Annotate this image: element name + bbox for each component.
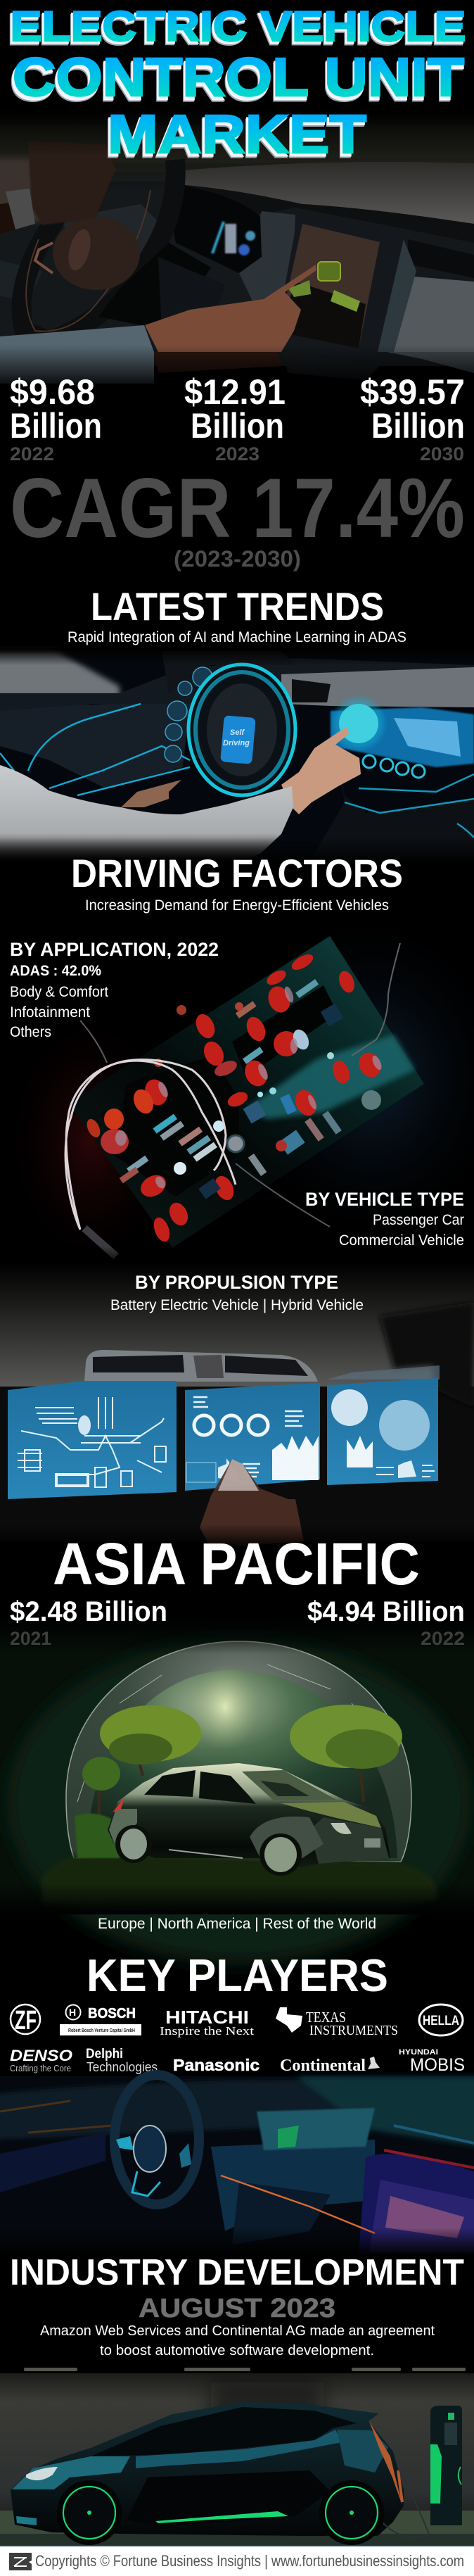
by application segment bbox=[10, 939, 219, 1040]
red highlights on capsules bbox=[115, 985, 383, 1190]
photo: futuristic cockpit bbox=[0, 2075, 474, 2256]
dome bbox=[66, 1641, 411, 1862]
trends photo: self driving dashboard: Self bbox=[230, 728, 245, 737]
by vehicle type segment: Passenger Car bbox=[373, 1212, 464, 1228]
components bbox=[84, 952, 385, 1244]
driving factors text: Increasing Demand for Energy-Efficient Vehicles bbox=[85, 897, 389, 914]
circuit board photo bbox=[0, 908, 474, 1274]
icon: Fortune Business Insights logo bbox=[9, 2553, 32, 2570]
development description bbox=[40, 2323, 435, 2359]
regional values: $2.48 Billion bbox=[10, 1596, 167, 1627]
stat 2030: $39.57 bbox=[360, 372, 465, 412]
logo: Bosch: BOSCH bbox=[88, 2006, 136, 2021]
by propulsion type segment: BY PROPULSION TYPE bbox=[135, 1272, 338, 1293]
industry development heading: INDUSTRY DEVELOPMENT bbox=[10, 2252, 464, 2293]
logo: Hella bbox=[419, 2004, 463, 2035]
regional values: $4.94 Billion bbox=[307, 1596, 465, 1627]
stat 2022: 2022 bbox=[10, 443, 54, 465]
teal lit band bbox=[246, 1035, 415, 1119]
wires bbox=[65, 1060, 236, 1230]
by application segment: BY APPLICATION, 2022 bbox=[10, 939, 219, 960]
left wheel bbox=[57, 2480, 122, 2545]
logo: Hyundai Mobis: HYUNDAI bbox=[399, 2048, 438, 2057]
logo: Hyundai Mobis: MOBIS bbox=[410, 2055, 465, 2075]
latest trends heading: LATEST TRENDS bbox=[91, 584, 384, 629]
logo: Denso: Crafting the Core bbox=[10, 2063, 71, 2073]
by vehicle type segment bbox=[305, 1189, 464, 1249]
title line 1: ELECTRIC VEHICLE bbox=[8, 5, 464, 52]
CAGR period: (2023-2030) bbox=[174, 546, 301, 572]
by vehicle type segment: BY VEHICLE TYPE bbox=[305, 1189, 464, 1210]
development description: Amazon Web Services and Continental AG made an agreement bbox=[40, 2323, 435, 2339]
logo: Hyundai Mobis bbox=[399, 2048, 465, 2075]
title line 3: MARKET bbox=[108, 104, 366, 165]
resistors and small parts bbox=[120, 979, 381, 1199]
by vehicle type segment: Commercial Vehicle bbox=[339, 1232, 464, 1249]
photo: electric car charging bbox=[0, 2368, 474, 2546]
panel left bbox=[8, 1381, 177, 1499]
title line 2: CONTROL UNIT bbox=[13, 47, 464, 108]
title line 2: CONTROL UNIT bbox=[11, 51, 463, 111]
logo: Hitachi bbox=[160, 2007, 254, 2038]
stat 2023: Billion bbox=[191, 406, 284, 446]
title line 2: CONTROL UNIT bbox=[10, 52, 463, 113]
development description: to boost automotive software development. bbox=[100, 2343, 374, 2359]
charging post bbox=[430, 2406, 462, 2525]
title bbox=[8, 3, 466, 169]
propulsion photo: holographic panels bbox=[0, 1263, 474, 1548]
logo: Texas Instruments: INSTRUMENTS bbox=[309, 2023, 398, 2038]
logo: Panasonic: Panasonic bbox=[173, 2056, 260, 2074]
logo: Delphi: Delphi bbox=[86, 2047, 123, 2062]
title line 1: ELECTRIC VEHICLE bbox=[8, 6, 463, 53]
logo: Denso bbox=[10, 2047, 72, 2073]
car bbox=[11, 2402, 404, 2545]
driving factors heading: DRIVING FACTORS bbox=[71, 851, 403, 895]
regional values: 2021 bbox=[10, 1628, 51, 1649]
regional values bbox=[10, 1596, 465, 1649]
logo: ZF: ZF bbox=[15, 2006, 37, 2035]
logo: Hella: HELLA bbox=[423, 2014, 459, 2028]
regional values: 2022 bbox=[421, 1628, 465, 1649]
logo: ZF bbox=[11, 2004, 40, 2035]
stat 2023 bbox=[184, 372, 286, 465]
logo: Bosch: Robert Bosch Venture Capital GmbH bbox=[68, 2028, 135, 2033]
panel right bbox=[327, 1378, 438, 1485]
hero photo: hand touching dashboard screen bbox=[0, 106, 474, 391]
stat 2022 bbox=[10, 372, 102, 465]
company logos bbox=[10, 2004, 465, 2075]
stat 2030 bbox=[360, 372, 465, 465]
logo: Denso: DENSO bbox=[10, 2047, 72, 2064]
logo: Delphi: Technologies bbox=[87, 2060, 158, 2074]
other regions: Europe | North America | Rest of the World bbox=[98, 1916, 376, 1932]
by propulsion type segment: Battery Electric Vehicle | Hybrid Vehicle bbox=[110, 1297, 364, 1313]
logo: Bosch bbox=[60, 2004, 141, 2035]
board bbox=[68, 936, 424, 1248]
logo: Hitachi: Inspire the Next bbox=[160, 2024, 254, 2038]
grass mound bbox=[42, 1851, 437, 1904]
stat 2022: Billion bbox=[10, 406, 102, 446]
by application segment: Infotainment bbox=[10, 1004, 90, 1021]
stat 2023: 2023 bbox=[215, 443, 260, 465]
stat 2030: 2030 bbox=[420, 443, 464, 465]
market value stats bbox=[10, 372, 465, 465]
trends photo: self driving dashboard bbox=[0, 648, 474, 863]
logo: Hitachi: HITACHI bbox=[165, 2007, 249, 2028]
logo: Texas Instruments bbox=[276, 2007, 398, 2038]
trends photo: self driving dashboard: Driving bbox=[223, 739, 250, 747]
title line 3: MARKET bbox=[105, 107, 364, 168]
logo: Delphi bbox=[86, 2047, 158, 2074]
panel middle bbox=[185, 1383, 320, 1491]
car bbox=[108, 1763, 390, 1876]
by propulsion type segment bbox=[110, 1272, 364, 1313]
photo: car in glass dome bbox=[0, 1619, 474, 1964]
right wheel bbox=[319, 2480, 384, 2545]
stat 2023: $12.91 bbox=[184, 372, 286, 412]
development date: AUGUST 2023 bbox=[139, 2294, 335, 2323]
logo: Continental: Continental bbox=[280, 2057, 366, 2075]
asia pacific heading: ASIA PACIFIC bbox=[53, 1531, 420, 1597]
latest trends text: Rapid Integration of AI and Machine Learning in ADAS bbox=[68, 629, 406, 645]
stat 2022: $9.68 bbox=[10, 372, 95, 412]
footer bar bbox=[0, 2546, 474, 2576]
by application segment: Body & Comfort bbox=[10, 984, 108, 1000]
by application segment: ADAS : 42.0% bbox=[10, 963, 101, 979]
key players heading: KEY PLAYERS bbox=[87, 1950, 388, 2001]
by application segment: Others bbox=[10, 1024, 51, 1040]
logo: Texas Instruments: TEXAS bbox=[306, 2009, 346, 2026]
logo: Bosch: H bbox=[69, 2007, 76, 2018]
hand bbox=[200, 1459, 304, 1548]
title line 1: ELECTRIC VEHICLE bbox=[10, 3, 466, 50]
trees bbox=[82, 1705, 402, 1844]
title line 3: MARKET bbox=[105, 108, 364, 169]
